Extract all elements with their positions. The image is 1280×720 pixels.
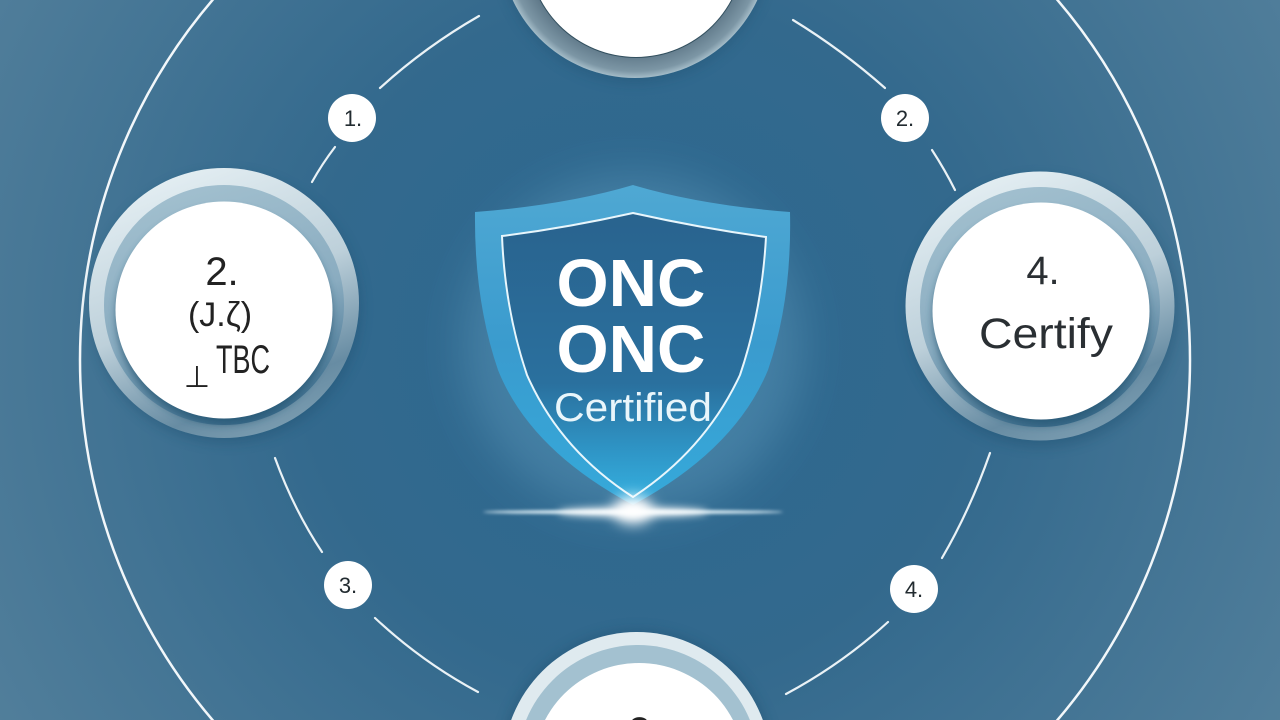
shield heading line one: ONC: [557, 246, 705, 321]
step number: 4.: [1026, 249, 1060, 293]
step label: Certify: [979, 310, 1114, 358]
step garbled line two: [184, 338, 270, 394]
badge: 4: [890, 565, 938, 613]
node: top circle: [500, 0, 770, 83]
badge: 2: [881, 94, 929, 142]
step garbled line two: ⊥: [184, 361, 210, 394]
node: left circle with step 2: [89, 168, 361, 443]
badge: 3: 3.: [339, 573, 357, 598]
inner connector arcs: [275, 16, 990, 694]
shield subheading: Certified: [554, 386, 712, 430]
shield badge: [475, 185, 790, 505]
shield glow: [463, 175, 803, 515]
node: bottom circle: [500, 630, 774, 720]
light flare under shield: [483, 496, 783, 524]
step garbled line two: TBC: [216, 338, 270, 382]
badge: 2: 2.: [896, 106, 914, 131]
node: right circle with step 4: [906, 172, 1177, 447]
badge: 4: 4.: [905, 577, 923, 602]
badge: 3: [324, 561, 372, 609]
shield heading line two: ONC: [557, 312, 705, 387]
shield face: [502, 213, 766, 497]
badge: 1: 1.: [344, 106, 362, 131]
badge: 1: [328, 94, 376, 142]
shield rim: [475, 185, 790, 505]
step garbled line one: (J.ζ): [188, 296, 252, 334]
step number: 2.: [205, 250, 239, 294]
